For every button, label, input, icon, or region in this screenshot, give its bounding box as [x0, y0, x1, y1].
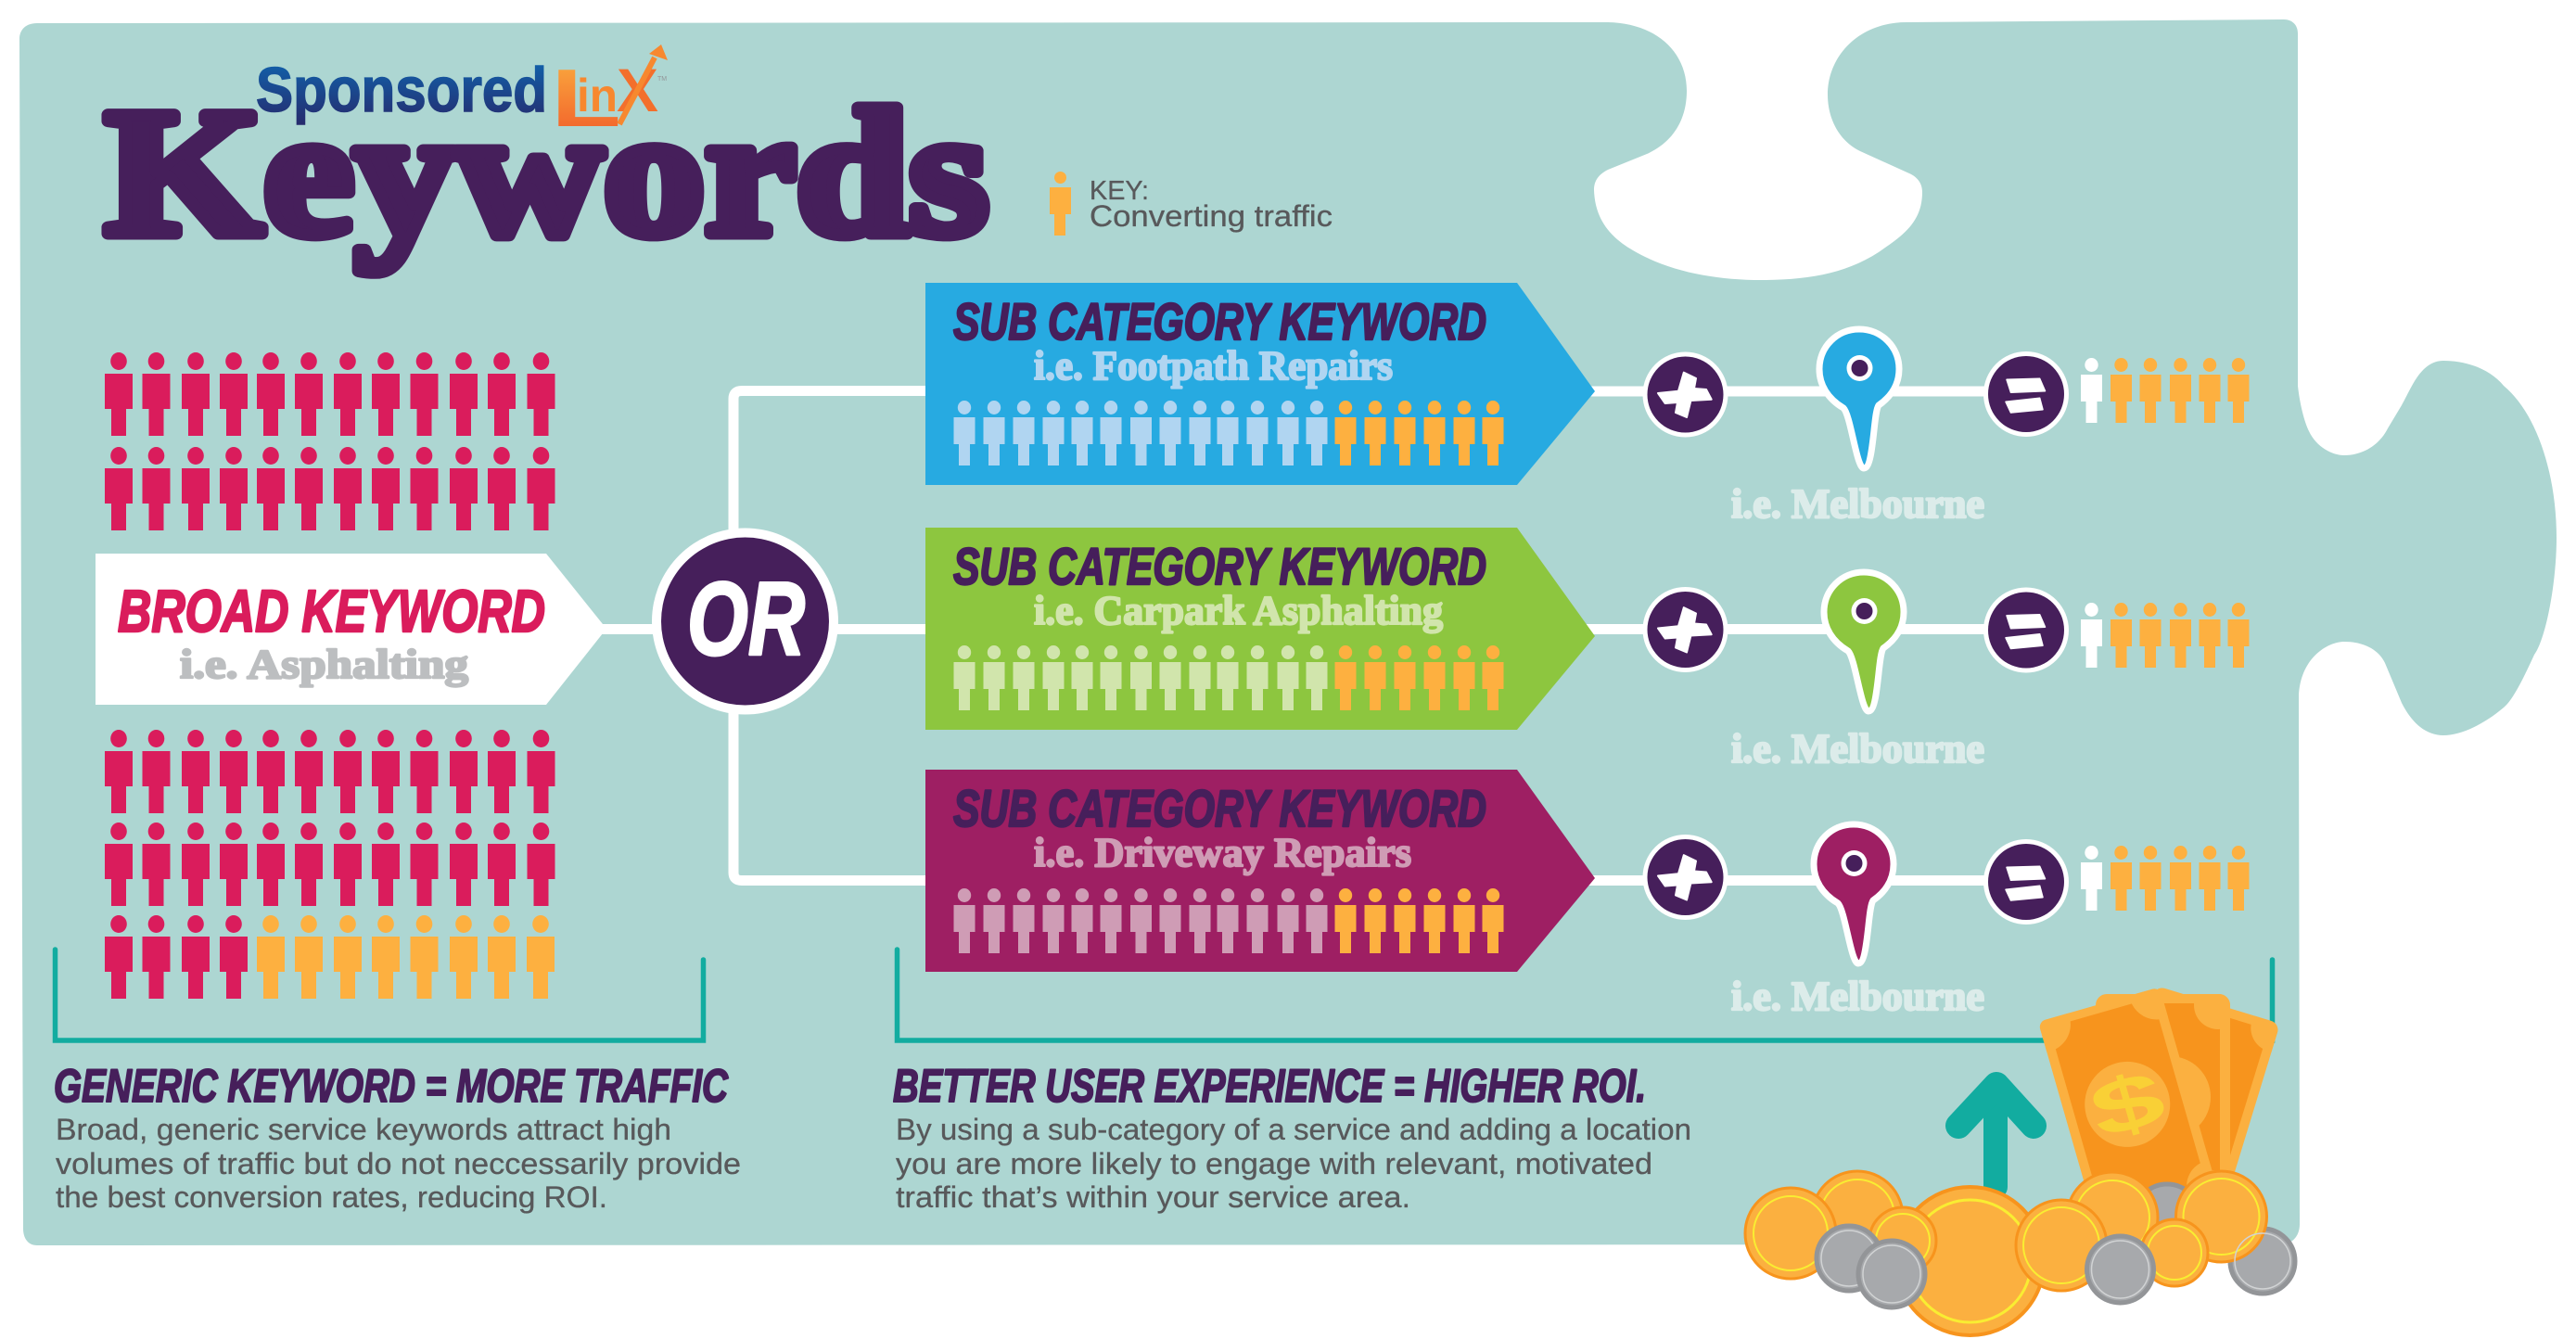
OR badge — [652, 529, 838, 714]
text block: generic keyword: the best conversion rates, reducing ROI. — [56, 1180, 607, 1214]
people group: green row result — [2081, 603, 2250, 668]
logo: SponsoredLinx: X — [617, 56, 658, 124]
banner: broad keyword: BROAD KEYWORD — [118, 578, 545, 644]
banner: magenta sub category: SUB CATEGORY KEYWORD — [953, 779, 1486, 837]
icon: banknotes: $ — [2081, 1054, 2174, 1155]
icon: plus green row — [1643, 587, 1728, 672]
icon: location pin magenta — [1814, 824, 1894, 963]
people group: blue row result — [2081, 358, 2250, 423]
key: converting traffic legend — [1050, 172, 1333, 236]
label: Melbourne green row: i.e. Melbourne — [1731, 726, 1984, 772]
icon: plus magenta row — [1643, 835, 1728, 920]
banner: blue sub category: i.e. Footpath Repairs — [1034, 343, 1393, 389]
label: Melbourne blue row: i.e. Melbourne — [1731, 481, 1984, 527]
text block: better user experience: traffic that’s within your service area. — [896, 1180, 1410, 1214]
text block: better user experience — [893, 1060, 1691, 1214]
logo: SponsoredLinx: in — [577, 70, 618, 121]
banner: broad keyword: i.e. Asphalting — [180, 642, 468, 687]
logo: SponsoredLinx: Sponsored — [256, 55, 547, 125]
text block: better user experience: BETTER USER EXPERIENCE = HIGHER ROI. — [893, 1060, 1646, 1112]
logo: SponsoredLinx: L — [551, 52, 621, 144]
banner: magenta sub category — [925, 770, 1595, 972]
icon: location pin green — [1824, 572, 1904, 711]
text block: generic keyword: Broad, generic service keywords attract high — [56, 1113, 671, 1146]
banner: green sub category: SUB CATEGORY KEYWORD — [953, 537, 1486, 595]
banner: blue sub category: SUB CATEGORY KEYWORD — [953, 292, 1486, 351]
text block: generic keyword: GENERIC KEYWORD = MORE TRAFFIC — [54, 1060, 729, 1112]
icon: equals green row — [1983, 588, 2069, 673]
icon: equals blue row — [1983, 351, 2069, 437]
people group: broad traffic rows 1-2 — [105, 352, 555, 530]
title: Keywords: Keywords — [105, 72, 988, 274]
banner: broad keyword — [96, 554, 606, 705]
key: converting traffic legend: Converting traffic — [1090, 199, 1333, 233]
icon: location pin blue — [1819, 329, 1899, 468]
text block: better user experience: you are more likely to engage with relevant, motivated — [896, 1147, 1652, 1180]
icon: teal up arrow — [1958, 1085, 2034, 1187]
text block: generic keyword — [54, 1060, 741, 1214]
text block: generic keyword: volumes of traffic but do not neccessarily provide — [56, 1147, 741, 1180]
banner: blue sub category — [925, 283, 1595, 485]
people group: magenta row result — [2081, 846, 2250, 911]
bracket: left — [56, 950, 703, 1040]
icon: pile of coins — [1745, 1171, 2295, 1335]
icon: banknotes — [2040, 988, 2277, 1187]
banner: green sub category — [925, 528, 1595, 730]
text block: better user experience: By using a sub-category of a service and adding a location — [896, 1113, 1691, 1146]
OR badge: OR — [687, 561, 805, 677]
bracket: right — [898, 950, 2272, 1040]
connector lines — [593, 391, 2026, 881]
key: converting traffic legend: KEY: — [1090, 176, 1149, 206]
people group: broad traffic rows 3-5 — [105, 730, 555, 999]
icon: plus blue row — [1643, 352, 1728, 438]
banner: green sub category: i.e. Carpark Asphalting — [1034, 588, 1443, 633]
logo: SponsoredLinx: TM — [657, 76, 667, 83]
label: Melbourne magenta row: i.e. Melbourne — [1731, 974, 1984, 1019]
icon: equals magenta row — [1983, 839, 2069, 925]
banner: magenta sub category: i.e. Driveway Repairs — [1034, 830, 1411, 875]
logo: SponsoredLinx — [256, 45, 668, 144]
